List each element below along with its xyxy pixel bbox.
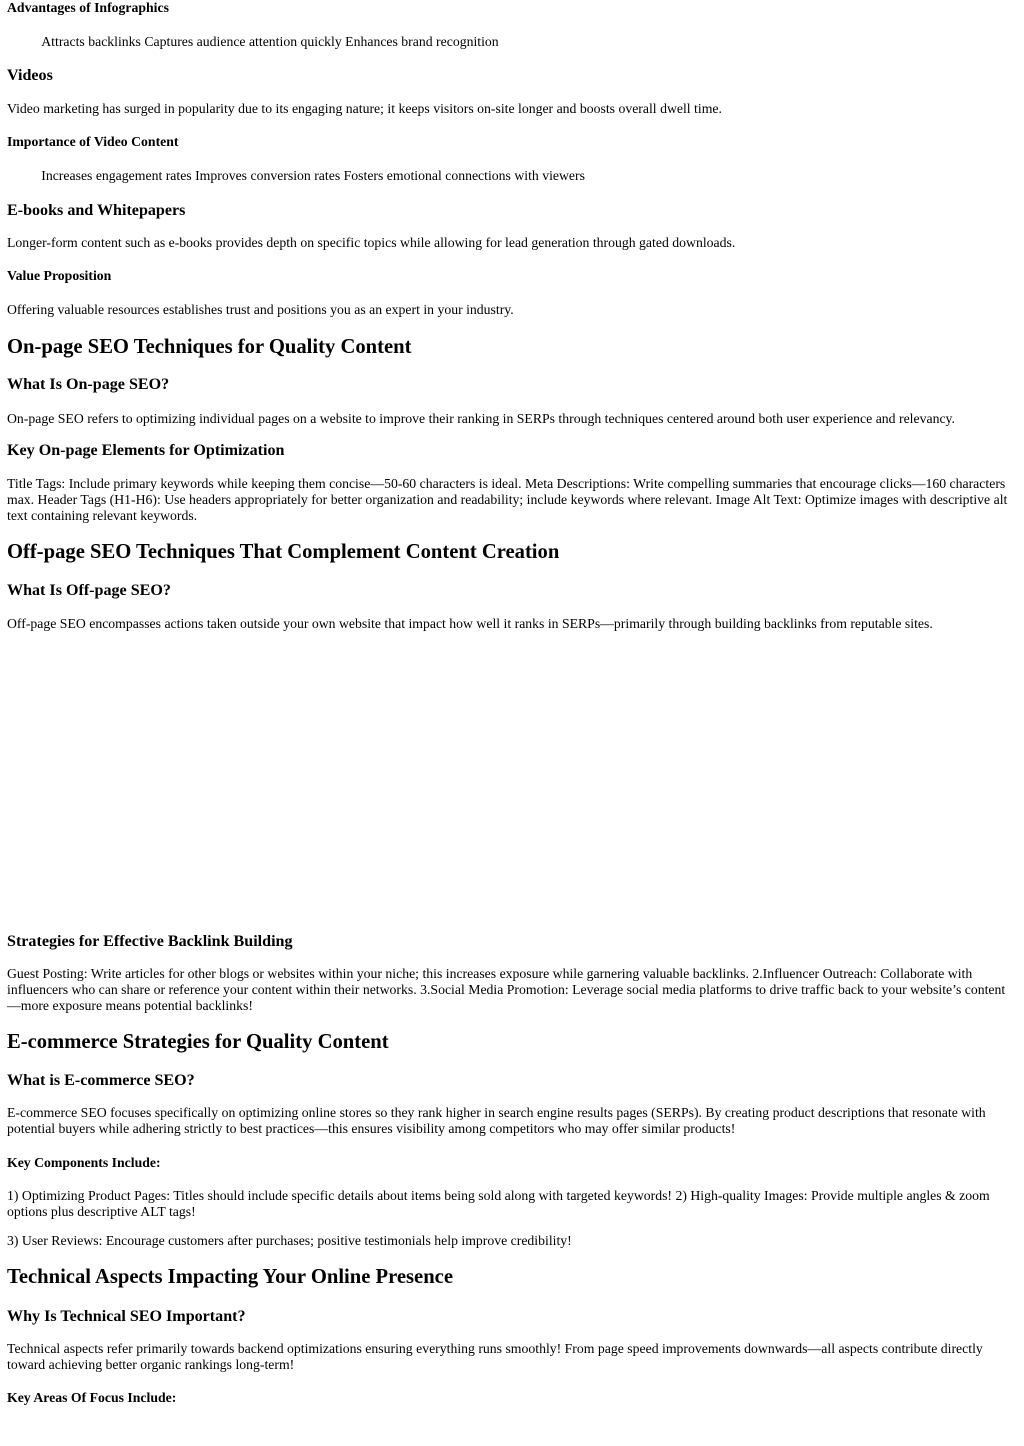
heading: what is on-page SEO: What Is On-page SEO? [7,376,169,393]
text: technical SEO explanation: Technical aspects refer primarily towards backend optimizations ensuring everything runs smoothly! From page speed improvements downwards—all aspects contribute directly [7,1341,983,1356]
text: backlink strategies: influencers who can share or reference your content within their networks. 3.Social Media Promotion: Leverage social media platforms to drive traffic back to your website’s content [7,982,1005,997]
text: e-commerce SEO definition: potential buyers while adhering strictly to best practices—this ensures visibility among competitors who may offer similar products! [7,1121,735,1136]
text: on-page elements [7,476,1008,523]
heading: value proposition: Value Proposition [7,268,111,283]
list: video benefits: Increases engagement rates Improves conversion rates Fosters emotional connections with viewers [41,168,585,183]
heading: technical aspects: Technical Aspects Impacting Your Online Presence [7,1266,453,1288]
text: on-page SEO definition: On-page SEO refers to optimizing individual pages on a website to improve their ranking in SERPs through techniques centered around both user experience and relevancy. [7,411,955,426]
text: video marketing: Video marketing has surged in popularity due to its engaging nature; it keeps visitors on-site longer and boosts overall dwell time. [7,101,722,116]
text: e-commerce SEO definition [7,1105,986,1136]
heading: videos: Videos [7,67,53,84]
text: backlink strategies: —more exposure means potential backlinks! [7,998,253,1012]
text: components one and two [7,1188,990,1219]
heading: backlink strategies: Strategies for Effective Backlink Building [7,933,293,950]
heading: what is off-page SEO: What Is Off-page SEO? [7,582,171,599]
heading: why technical SEO: Why Is Technical SEO Important? [7,1308,246,1325]
heading: advantages of infographics: Advantages of Infographics [7,0,169,15]
text: components one and two: options plus descriptive ALT tags! [7,1204,196,1219]
text: component three: 3) User Reviews: Encourage customers after purchases; positive testimonials help improve credibility! [7,1233,572,1248]
text: on-page elements: text containing relevant keywords. [7,508,197,522]
heading: key on-page elements: Key On-page Elements for Optimization [7,442,284,459]
text: on-page elements: Title Tags: Include primary keywords while keeping them concise—50-60 characters is ideal. Meta Descriptions: Write compelling summaries that encourage clicks—160 characters [7,476,1005,491]
text: on-page elements: max. Header Tags (H1-H6): Use headers appropriately for better organization and readability; include keywords where relevant. Image Alt Text: Optimize images with descriptive alt [7,492,1007,507]
heading: key components: Key Components Include: [7,1155,161,1170]
text: longer-form content: Longer-form content such as e-books provides depth on specific topics while allowing for lead generation through gated downloads. [7,235,735,250]
heading: key areas of focus: Key Areas Of Focus Include: [7,1390,176,1405]
text: backlink strategies: Guest Posting: Write articles for other blogs or websites within your niche; this increases exposure while garnering valuable backlinks. 2.Influencer Outreach: Collaborate with [7,966,972,981]
text: backlink strategies [6,966,1006,1013]
heading: on-page SEO techniques: On-page SEO Techniques for Quality Content [7,336,411,358]
text: e-commerce SEO definition: E-commerce SEO focuses specifically on optimizing online stores so they rank higher in search engine results pages (SERPs). By creating product descriptions that resonate with [7,1105,986,1120]
text: off-page SEO definition: Off-page SEO encompasses actions taken outside your own website that impact how well it ranks in SERPs—primarily through building backlinks from reputable sites. [7,616,933,631]
heading: importance of video content: Importance of Video Content [7,134,178,149]
text: valuable resources: Offering valuable resources establishes trust and positions you as an expert in your industry. [7,302,514,317]
heading: off-page SEO techniques: Off-page SEO Techniques That Complement Content Creation [7,541,559,563]
text: technical SEO explanation [7,1341,983,1372]
heading: e-commerce strategies: E-commerce Strategies for Quality Content [7,1031,389,1053]
list: infographic advantages: Attracts backlinks Captures audience attention quickly Enhances brand recognition [41,34,499,49]
text: components one and two: 1) Optimizing Product Pages: Titles should include specific details about items being sold along with targeted keywords! 2) High-quality Images: Provide multiple angles & zoom [7,1188,990,1203]
heading: e-books and whitepapers: E-books and Whitepapers [7,202,185,219]
text: technical SEO explanation: toward achieving better organic rankings long-term! [7,1357,294,1372]
heading: what is e-commerce SEO: What is E-commerce SEO? [7,1072,195,1089]
